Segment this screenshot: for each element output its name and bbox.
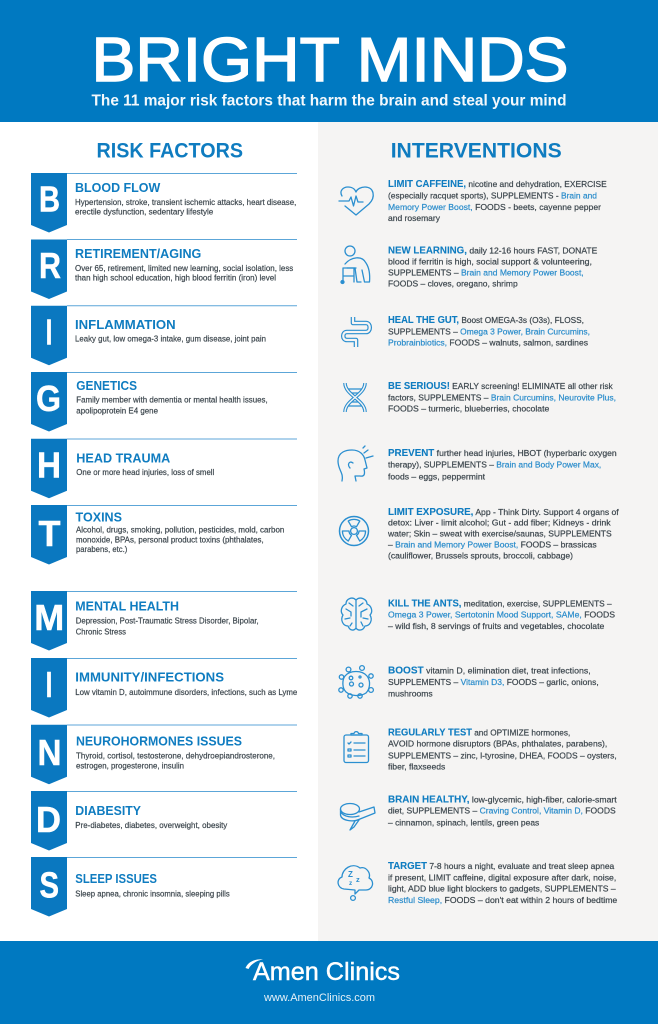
intervention: be serious: FOODS – turmeric, blueberries, chocolate xyxy=(388,404,550,414)
intervention: target: light, ADD blue light blockers to gadgets, SUPPLEMENTS – xyxy=(388,884,616,894)
heading: interventions: INTERVENTIONS xyxy=(391,138,562,162)
intervention: new learning: NEW LEARNING, daily 12-16 hours FAST, DONATE xyxy=(388,245,598,256)
risk factor: immunity/infections: Low vitamin D, autoimmune disorders, infections, such as Lyme xyxy=(75,687,297,697)
risk factor: neurohormones issues: Thyroid, cortisol, testosterone, dehydroepiandrosterone, xyxy=(76,751,275,761)
risk factor: head trauma: One or more head injuries, loss of smell xyxy=(76,467,214,477)
risk factor: inflammation: Leaky gut, low omega-3 intake, gum disease, joint pain xyxy=(75,334,266,344)
intervention: limit caffeine: Memory Power Boost, FOODS - beets, cayenne pepper xyxy=(388,202,601,212)
intervention: new learning xyxy=(341,245,598,288)
intervention: target: TARGET 7-8 hours a night, evaluate and treat sleep apnea xyxy=(388,861,615,872)
risk factor: genetics: apolipoprotein E4 gene xyxy=(76,406,158,416)
risk factor: mental health: M xyxy=(34,597,64,638)
header banner xyxy=(0,0,658,122)
risk factor: diabesity: Pre-diabetes, diabetes, overweight, obesity xyxy=(75,820,228,830)
intervention: kill the ants: – wild fish, 8 servings of fruits and vegetables, chocolate xyxy=(388,621,605,631)
risk factor: immunity/infections: I xyxy=(46,664,52,705)
risk factor: genetics: GENETICS xyxy=(76,379,137,393)
risk factor: blood flow: Hypertension, stroke, transient ischemic attacks, heart disease, xyxy=(75,197,296,207)
risk factor: genetics xyxy=(31,372,297,432)
intervention: boost: BOOST vitamin D, elimination diet, treat infections, xyxy=(388,666,591,677)
icon: DNA helix xyxy=(345,383,365,412)
icon: measuring tape xyxy=(340,804,375,830)
intervention: regularly test: SUPPLEMENTS – zinc, l-tyrosine, DHEA, FOODS – oysters, xyxy=(388,750,617,760)
risk factor: retirement/aging: Over 65, retirement, limited new learning, social isolation, less xyxy=(75,263,293,273)
risk factor: sleep issues: SLEEP ISSUES xyxy=(75,872,157,886)
risk factor: genetics: G xyxy=(36,378,61,419)
icon: virus xyxy=(339,666,373,698)
intervention: regularly test: REGULARLY TEST and OPTIMIZE hormones, xyxy=(388,727,570,738)
intervention: new learning: FOODS – cloves, oregano, shrimp xyxy=(388,278,518,288)
risk factor: blood flow: erectile dysfunction, sedentary lifestyle xyxy=(75,207,214,217)
intervention: be serious: BE SERIOUS! EARLY screening! ELIMINATE all other risk xyxy=(388,381,613,392)
icon: person with walker xyxy=(341,246,370,284)
intervention: limit caffeine xyxy=(339,179,607,223)
risk factor: inflammation xyxy=(31,306,297,365)
intervention: prevent xyxy=(338,446,617,481)
intervention: new learning: SUPPLEMENTS – Brain and Memory Power Boost, xyxy=(388,267,584,277)
intervention: kill the ants xyxy=(341,598,615,631)
risk factor: diabesity xyxy=(31,791,297,850)
risk factor: diabesity: DIABESITY xyxy=(75,804,142,818)
panel: risk factors xyxy=(31,173,297,916)
risk factor: toxins: TOXINS xyxy=(76,510,122,524)
intervention: heal the gut: SUPPLEMENTS – Omega 3 Power, Brain Curcumins, xyxy=(388,326,590,336)
intervention: kill the ants: Omega 3 Power, Sertotonin Mood Support, SAMe, FOODS xyxy=(388,610,615,620)
intervention: limit exposure: detox: Liver - limit alcohol; Gut - add fiber; Kidneys - drink xyxy=(388,518,611,528)
title: BRIGHT MINDS xyxy=(92,26,568,95)
icon: radiation symbol xyxy=(340,516,368,546)
risk factor: sleep issues: Sleep apnea, chronic insomnia, sleeping pills xyxy=(75,888,230,898)
risk factor: sleep issues: S xyxy=(40,864,59,906)
heading: risk factors: RISK FACTORS xyxy=(96,138,243,162)
risk factor: head trauma: H xyxy=(37,444,61,486)
intervention: regularly test: fiber, flaxseeds xyxy=(388,762,445,772)
risk factor: inflammation: I xyxy=(46,312,52,352)
intervention: target: Restful Sleep, FOODS – don't eat within 2 hours of bedtime xyxy=(388,895,618,905)
risk factor: neurohormones issues: NEUROHORMONES ISSUES xyxy=(76,734,242,748)
risk factor: immunity/infections: IMMUNITY/INFECTIONS xyxy=(75,670,224,684)
risk factor: blood flow: B xyxy=(39,179,60,220)
intervention: target xyxy=(338,861,618,905)
risk factor: blood flow xyxy=(31,173,297,232)
icon: brain xyxy=(341,598,372,630)
icon: sleep cloud xyxy=(338,866,373,900)
logo: Amen Clinics xyxy=(253,958,400,986)
risk factor: mental health xyxy=(31,591,297,650)
intervention: boost xyxy=(339,666,599,699)
website: www.AmenClinics.com xyxy=(263,992,375,1004)
icon: intestines xyxy=(343,316,370,348)
icon: heart with pulse xyxy=(339,187,373,215)
intervention: be serious: factors, SUPPLEMENTS – Brain Curcumins, Neurovite Plus, xyxy=(388,392,616,402)
panel: interventions background xyxy=(318,122,658,941)
intervention: limit exposure: – Brain and Memory Power Boost, FOODS – brassicas xyxy=(388,540,597,550)
intervention: boost: SUPPLEMENTS – Vitamin D3, FOODS – garlic, onions, xyxy=(388,677,599,687)
intervention: prevent: therapy), SUPPLEMENTS – Brain and Body Power Max, xyxy=(388,460,601,470)
intervention: prevent: PREVENT further head injuries, HBOT (hyperbaric oxygen xyxy=(388,448,617,459)
intervention: brain healthy: diet, SUPPLEMENTS – Craving Control, Vitamin D, FOODS xyxy=(388,806,616,816)
risk factor: toxins: Alcohol, drugs, smoking, pollution, pesticides, mold, carbon xyxy=(76,524,284,534)
risk factor: neurohormones issues: N xyxy=(38,732,62,773)
risk factor: toxins: T xyxy=(38,513,60,554)
risk factor: retirement/aging xyxy=(31,240,297,299)
intervention: new learning: blood if ferritin is high, social support & volunteering, xyxy=(388,256,592,266)
intervention: limit caffeine: and rosemary xyxy=(388,213,441,223)
risk factor: blood flow: BLOOD FLOW xyxy=(75,181,160,195)
risk factor: sleep issues xyxy=(31,857,297,916)
risk factor: neurohormones issues: estrogen, progesterone, insulin xyxy=(76,761,184,771)
risk factor: immunity/infections xyxy=(31,658,297,718)
icon: sleep cloud: z xyxy=(356,875,360,884)
intervention: limit exposure: (cauliflower, Brussels sprouts, broccoli, cabbage) xyxy=(388,550,573,560)
intervention: limit exposure: LIMIT EXPOSURE, App - Think Dirty. Support 4 organs of xyxy=(388,507,619,518)
risk factor: head trauma: HEAD TRAUMA xyxy=(76,452,170,466)
risk factor: retirement/aging: R xyxy=(39,245,61,286)
risk factor: genetics: Family member with dementia or mental health issues, xyxy=(76,394,268,404)
intervention: brain healthy: – cinnamon, spinach, lentils, green peas xyxy=(388,817,539,827)
icon: sleep cloud: Z xyxy=(348,870,353,879)
intervention: limit exposure xyxy=(340,507,619,560)
intervention: prevent: foods – eggs, peppermint xyxy=(388,471,486,481)
icon: clipboard checklist xyxy=(344,732,368,762)
icon: sleep cloud: z xyxy=(349,880,353,887)
risk factor: toxins: parabens, etc.) xyxy=(76,544,127,554)
risk factor: mental health: Chronic Stress xyxy=(76,627,126,637)
risk factor: toxins: monoxide, BPAs, personal product toxins (phthalates, xyxy=(76,534,264,544)
panel: interventions xyxy=(338,179,619,905)
intervention: limit exposure: water; Skin – sweat with exercise/saunas, SUPPLEMENTS xyxy=(387,529,612,539)
risk factor: retirement/aging: than high school education, high blood ferritin (iron) level xyxy=(75,273,276,283)
risk factor: head trauma xyxy=(31,439,297,498)
intervention: regularly test xyxy=(344,727,617,772)
intervention: heal the gut xyxy=(343,315,590,348)
intervention: limit caffeine: (especially racquet sports), SUPPLEMENTS - Brain and xyxy=(388,190,597,200)
intervention: heal the gut: Probrainbiotics, FOODS – walnuts, salmon, sardines xyxy=(388,338,588,348)
subtitle: The 11 major risk factors that harm the brain and steal your mind xyxy=(92,92,566,110)
risk factor: toxins xyxy=(31,505,297,564)
intervention: brain healthy xyxy=(340,794,617,830)
risk factor: mental health: MENTAL HEALTH xyxy=(75,599,179,613)
risk factor: mental health: Depression, Post-Traumatic Stress Disorder, Bipolar, xyxy=(76,615,259,625)
risk factor: neurohormones issues xyxy=(31,725,297,784)
risk factor: retirement/aging: RETIREMENT/AGING xyxy=(75,247,202,261)
intervention: heal the gut: HEAL THE GUT, Boost OMEGA-3s (O3s), FLOSS, xyxy=(388,315,584,326)
intervention: regularly test: AVOID hormone disruptors (BPAs, phthalates, parabens), xyxy=(388,739,607,749)
footer banner xyxy=(0,941,658,1024)
intervention: boost: mushrooms xyxy=(388,689,433,699)
intervention: be serious xyxy=(345,381,616,414)
icon: head with impact marks xyxy=(338,446,373,481)
intervention: limit caffeine: LIMIT CAFFEINE, nicotine and dehydration, EXERCISE xyxy=(388,179,607,190)
risk factor: inflammation: INFLAMMATION xyxy=(75,318,176,332)
intervention: target: if present, LIMIT caffeine, digital exposure after dark, noise, xyxy=(388,872,616,882)
intervention: brain healthy: BRAIN HEALTHY, low-glycemic, high-fiber, calorie-smart xyxy=(388,794,617,805)
intervention: kill the ants: KILL THE ANTS, meditation, exercise, SUPPLEMENTS – xyxy=(388,598,612,609)
risk factor: diabesity: D xyxy=(36,799,61,840)
